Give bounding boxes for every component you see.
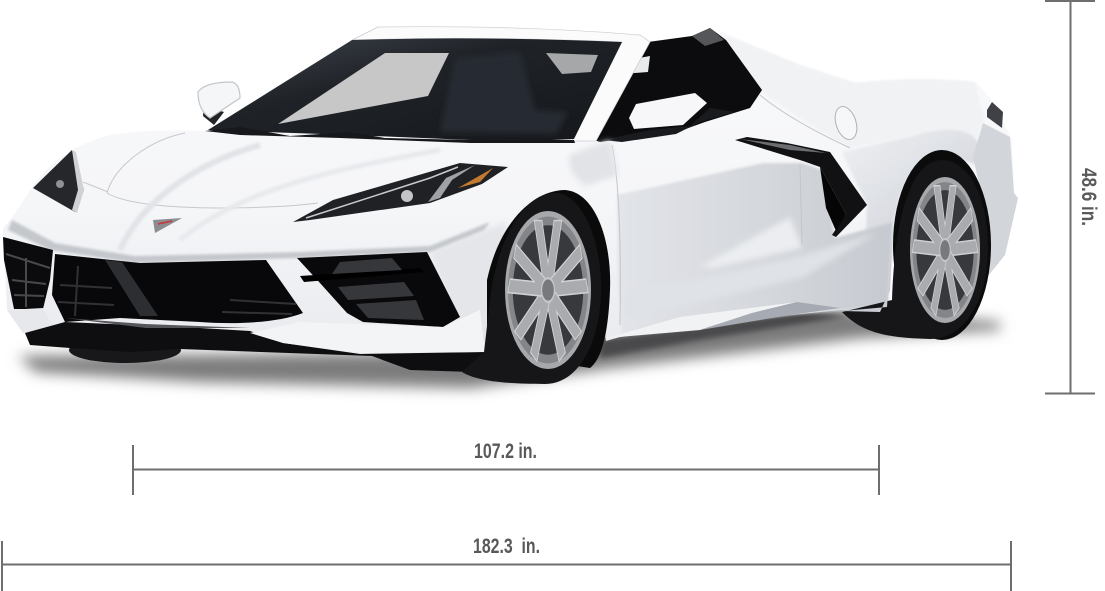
left door mirror bbox=[198, 82, 240, 125]
side highlight bbox=[700, 217, 802, 268]
right headlight bbox=[293, 163, 508, 222]
windshield glass bbox=[208, 38, 622, 141]
hood badge bbox=[153, 218, 182, 233]
front lip left bbox=[7, 308, 65, 333]
car: white convertible sports car, front three-quarter view bbox=[3, 27, 1018, 388]
right door mirror bbox=[629, 93, 707, 129]
sill shadow bbox=[700, 302, 840, 330]
windshield top frame and pillar bbox=[352, 27, 650, 141]
height label: 48.6 in. bbox=[1077, 168, 1100, 226]
rear deck panel shading bbox=[722, 34, 984, 150]
sill blade bbox=[607, 302, 797, 338]
right air intake bbox=[297, 252, 460, 327]
front wheel rim bbox=[505, 211, 591, 369]
dimension: wheelbase 107.2 in. bbox=[133, 440, 879, 495]
interior seat shading seen through glass bbox=[440, 52, 568, 134]
hood reflection bbox=[569, 140, 618, 186]
fuel door bbox=[831, 104, 861, 142]
car body silhouette bbox=[3, 27, 1018, 354]
dimension: overall height 48.6 in. bbox=[1045, 1, 1100, 394]
rear wheel arch bbox=[893, 150, 991, 340]
left side grille bbox=[3, 237, 53, 309]
rear lamp bbox=[987, 102, 1003, 128]
fascia shading bbox=[430, 222, 515, 352]
length label: 182.3 in. bbox=[473, 535, 540, 558]
front tire and tread bbox=[462, 193, 601, 384]
rear tire and tread bbox=[842, 160, 988, 339]
ground shadow bbox=[18, 306, 1000, 388]
hood lines bbox=[83, 133, 440, 250]
door shut line bbox=[612, 95, 850, 325]
front centre grille bbox=[52, 254, 303, 323]
left headlight bbox=[33, 150, 84, 213]
rear window reflection bbox=[546, 53, 598, 74]
side lower light band bbox=[625, 233, 877, 318]
rear wheel rim bbox=[910, 177, 980, 323]
wheelbase label: 107.2 in. bbox=[474, 440, 537, 463]
dimension: overall length 182.3 in. bbox=[2, 535, 1011, 591]
rear fascia bbox=[973, 123, 1018, 276]
front splitter bbox=[25, 318, 484, 372]
bumper crease band bbox=[8, 220, 490, 263]
under-sill shadow core bbox=[600, 312, 850, 358]
front wheel arch bbox=[487, 190, 610, 368]
side door panel shading bbox=[617, 163, 893, 334]
side air intake vent bbox=[735, 137, 867, 237]
lower fascia white blade bbox=[250, 310, 485, 353]
cabin interior and rear buttress bbox=[594, 28, 762, 142]
wiper cowl bbox=[205, 127, 575, 143]
sun reflection on windshield bbox=[278, 53, 449, 124]
far front tire bbox=[69, 337, 181, 363]
rear quarter panel bbox=[842, 130, 982, 232]
rear body skirt over tire bbox=[842, 222, 893, 312]
